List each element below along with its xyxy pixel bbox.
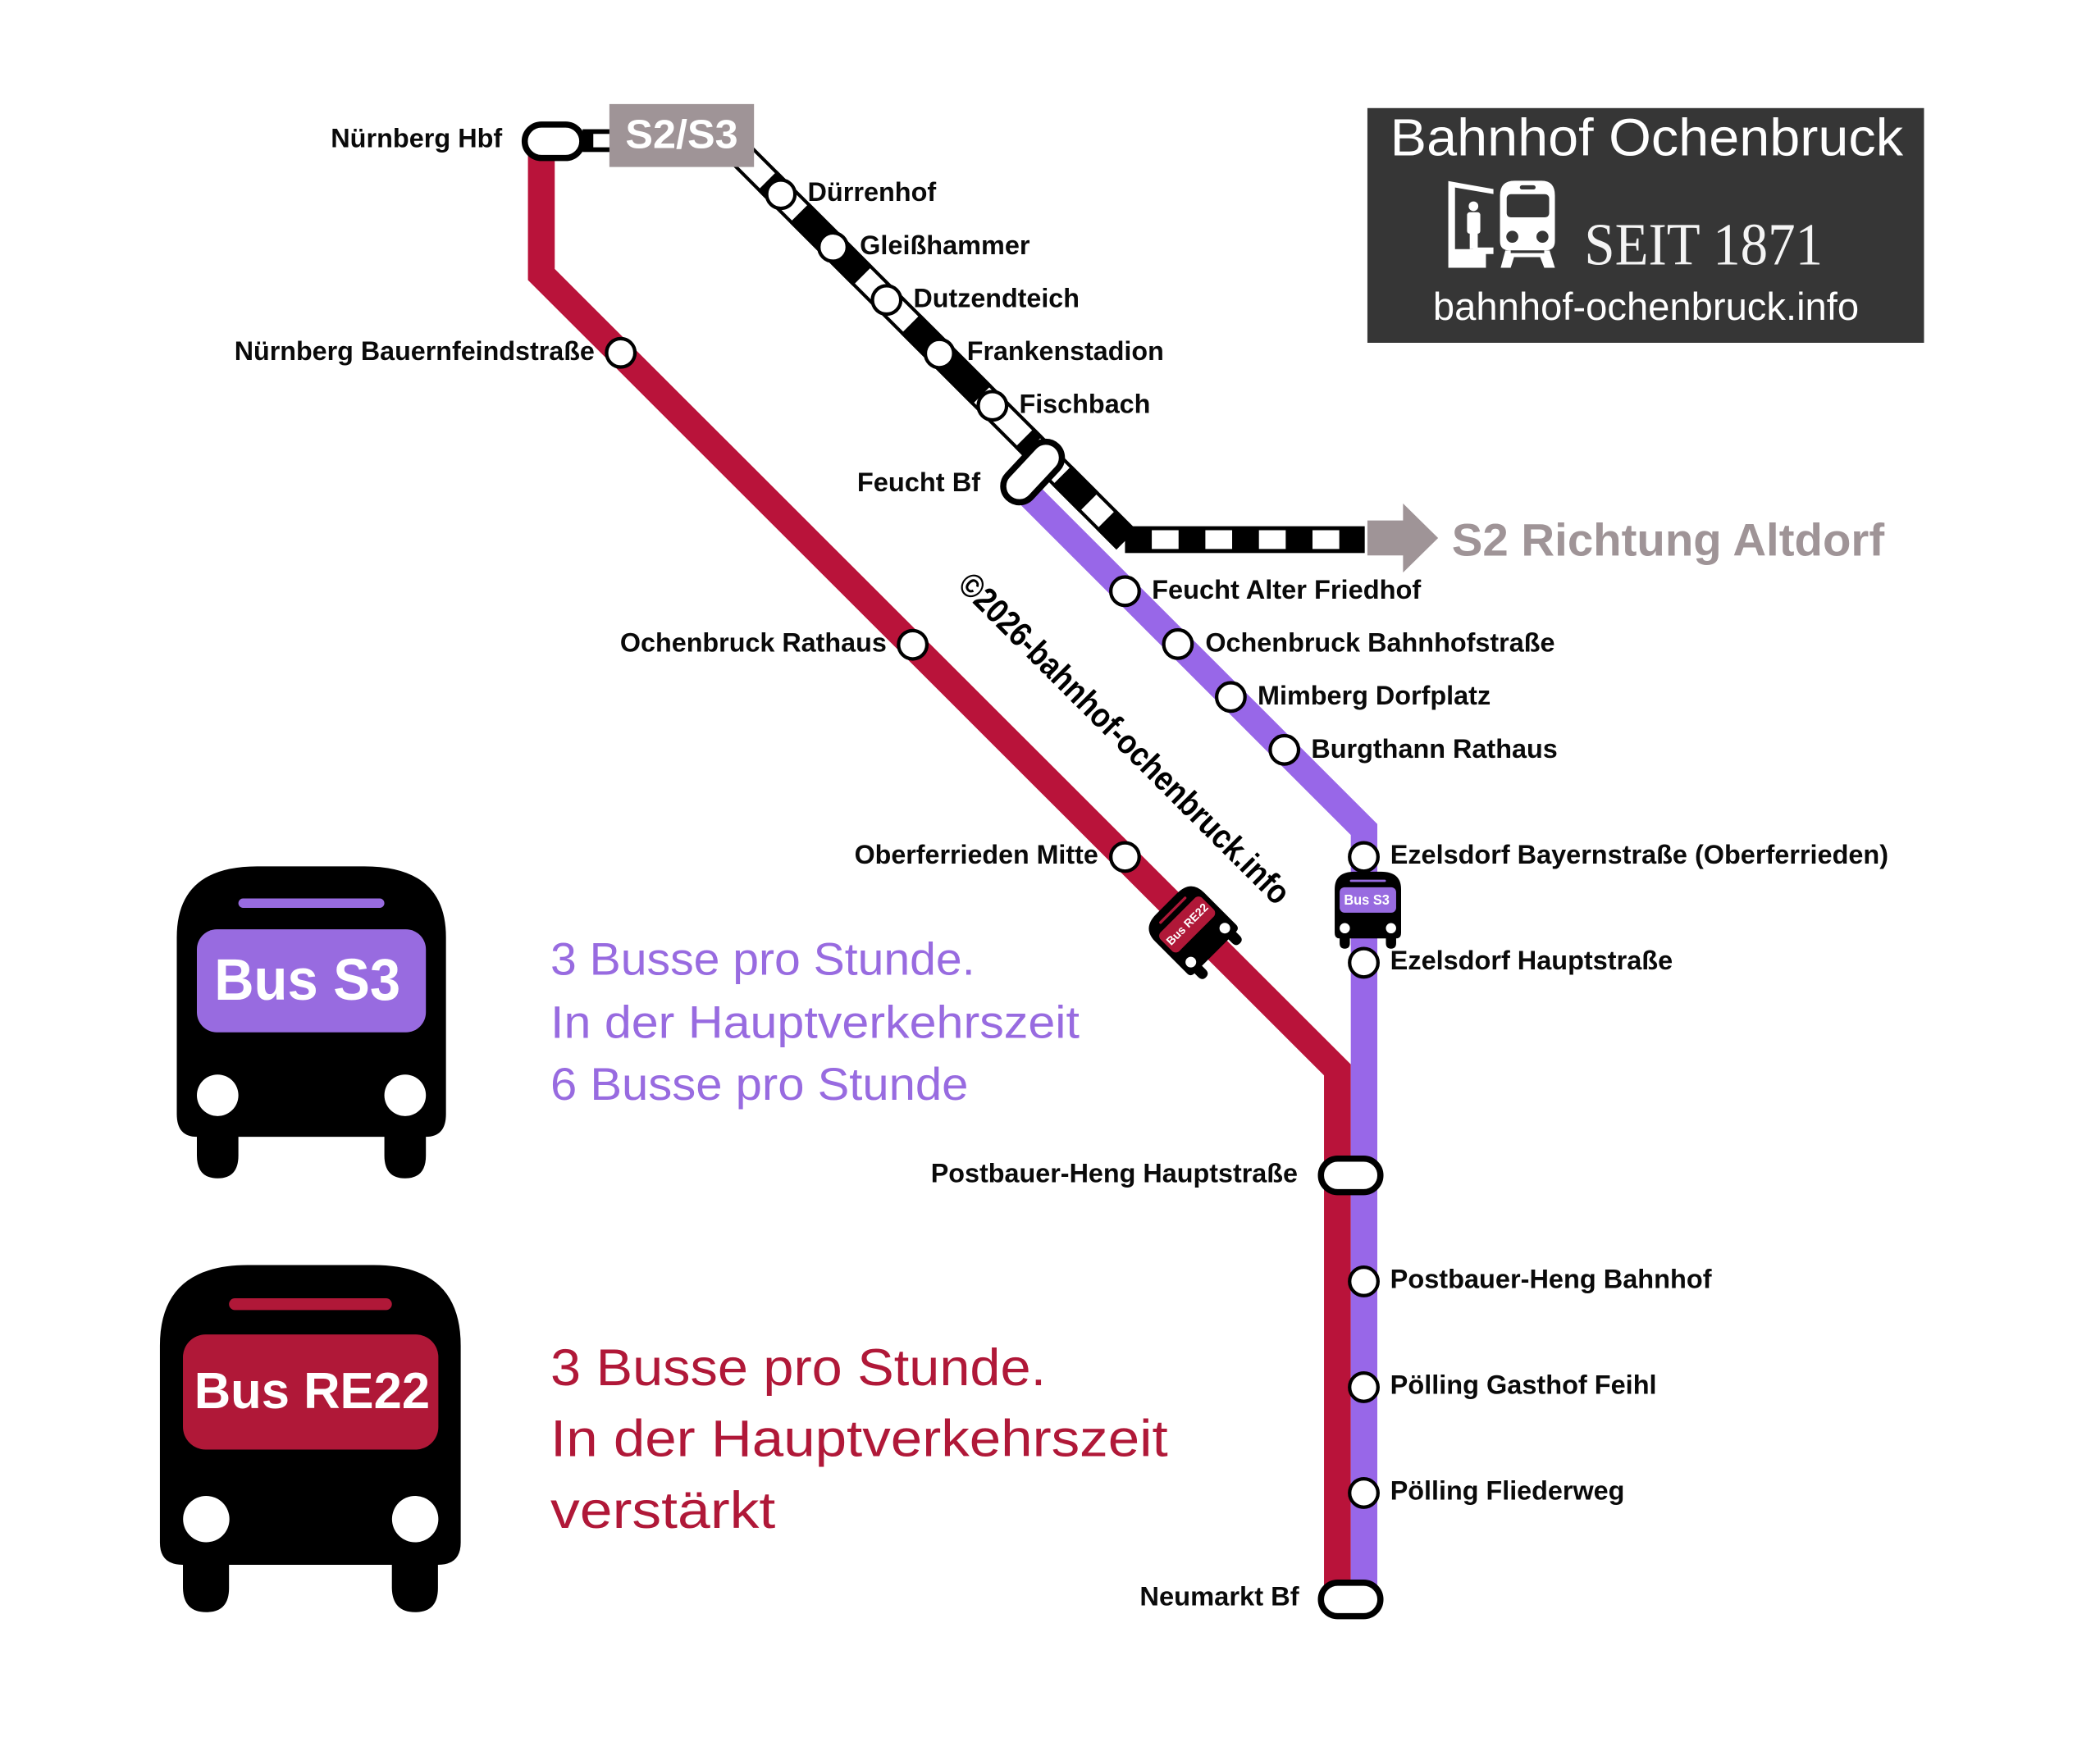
legend text: Bus S3 frequency: 6 Busse pro Stunde xyxy=(550,1059,968,1110)
label: S2 Richtung Altdorf: S2 Richtung Altdorf xyxy=(1452,515,1885,566)
legend text: Bus RE22 frequency: 3 Busse pro Stunde. xyxy=(550,1339,1046,1397)
legend text: Bus S3 frequency: 3 Busse pro Stunde. xyxy=(550,934,975,985)
station: Fischbach: Fischbach xyxy=(1019,389,1150,419)
station: Dürrenhof: Dürrenhof xyxy=(807,176,936,207)
panel: Bahnhof Ochenbruck logo xyxy=(1367,108,1924,343)
route line: S2/S3 railway xyxy=(582,130,1365,553)
text: website: bahnhof-ochenbruck.info xyxy=(1433,285,1859,329)
legend icon: Bus RE22 xyxy=(160,1265,461,1612)
heading: Bahnhof Ochenbruck: Bahnhof Ochenbruck xyxy=(1390,108,1903,166)
station: Dutzendteich: Dutzendteich xyxy=(913,283,1080,313)
icon: small bus S3 on map: Bus S3 xyxy=(1344,891,1390,908)
arrow: S2 direction xyxy=(1367,504,1438,572)
route badge: S2/S3: S2/S3 xyxy=(625,112,738,157)
station: Burgthann Rathaus: Burgthann Rathaus xyxy=(1311,733,1558,764)
station: Ochenbruck Bahnhofstraße: Ochenbruck Bahnhofstraße xyxy=(1205,627,1555,657)
station: Postbauer-Heng Bahnhof: Postbauer-Heng Bahnhof xyxy=(1390,1264,1712,1294)
station: Gleißhammer: Gleißhammer xyxy=(860,230,1030,260)
station: Neumarkt Bf xyxy=(1139,1581,1381,1616)
route line: Bus S3 xyxy=(1025,490,1364,1600)
station: Feucht Bf xyxy=(857,435,1069,509)
legend text: Bus RE22 frequency: verstärkt xyxy=(550,1482,775,1539)
station: Oberferrieden Mitte: Oberferrieden Mitte xyxy=(855,839,1098,869)
watermark: ©2026-bahnhof-ochenbruck.info xyxy=(951,564,1299,912)
legend text: Bus RE22 frequency: In der Hauptverkehrszeit xyxy=(550,1411,1168,1468)
station: Pölling Fliederweg: Pölling Fliederweg xyxy=(1390,1475,1624,1506)
station: Ezelsdorf Hauptstraße: Ezelsdorf Hauptstraße xyxy=(1390,945,1673,975)
station: Ezelsdorf Bayernstraße (Oberferrieden): Ezelsdorf Bayernstraße (Oberferrieden) xyxy=(1390,839,1888,869)
text: SEIT 1871: SEIT 1871 xyxy=(1584,211,1823,277)
legend text: Bus RE22 frequency xyxy=(550,1339,1168,1539)
station: Mimberg Dorfplatz: Mimberg Dorfplatz xyxy=(1258,680,1491,710)
icon: train front xyxy=(1500,180,1555,268)
station: Nürnberg Hbf xyxy=(331,123,582,158)
route line: Bus RE22 xyxy=(541,144,1337,1600)
station: Neumarkt Bf: Neumarkt Bf xyxy=(1139,1581,1299,1612)
icon: small bus RE22 on map: Bus RE22 xyxy=(1164,901,1212,948)
legend icon: Bus S3: Bus S3 xyxy=(214,947,400,1013)
icon: small bus S3 on map xyxy=(1335,872,1401,949)
station: Pölling Gasthof Feihl: Pölling Gasthof Feihl xyxy=(1390,1370,1657,1400)
station: Feucht Bf: Feucht Bf xyxy=(857,467,980,497)
station: Feucht Alter Friedhof: Feucht Alter Friedhof xyxy=(1152,574,1421,604)
station: Nürnberg Hbf: Nürnberg Hbf xyxy=(331,123,502,153)
station: Frankenstadion: Frankenstadion xyxy=(967,335,1164,366)
legend icon: Bus S3 xyxy=(177,866,446,1179)
icon: small bus RE22 on map xyxy=(1142,879,1248,985)
route badge: S2/S3 xyxy=(609,104,754,167)
station: Nürnberg Bauernfeindstraße: Nürnberg Bauernfeindstraße xyxy=(235,335,595,366)
station: Ochenbruck Rathaus: Ochenbruck Rathaus xyxy=(620,627,887,657)
legend icon: Bus RE22: Bus RE22 xyxy=(194,1363,430,1420)
icon: platform shelter with person xyxy=(1449,181,1494,268)
legend text: Bus S3 frequency: In der Hauptverkehrszeit xyxy=(550,996,1080,1047)
station: Postbauer-Heng Hauptstraße: Postbauer-Heng Hauptstraße xyxy=(931,1158,1298,1188)
legend text: Bus S3 frequency xyxy=(550,934,1080,1110)
